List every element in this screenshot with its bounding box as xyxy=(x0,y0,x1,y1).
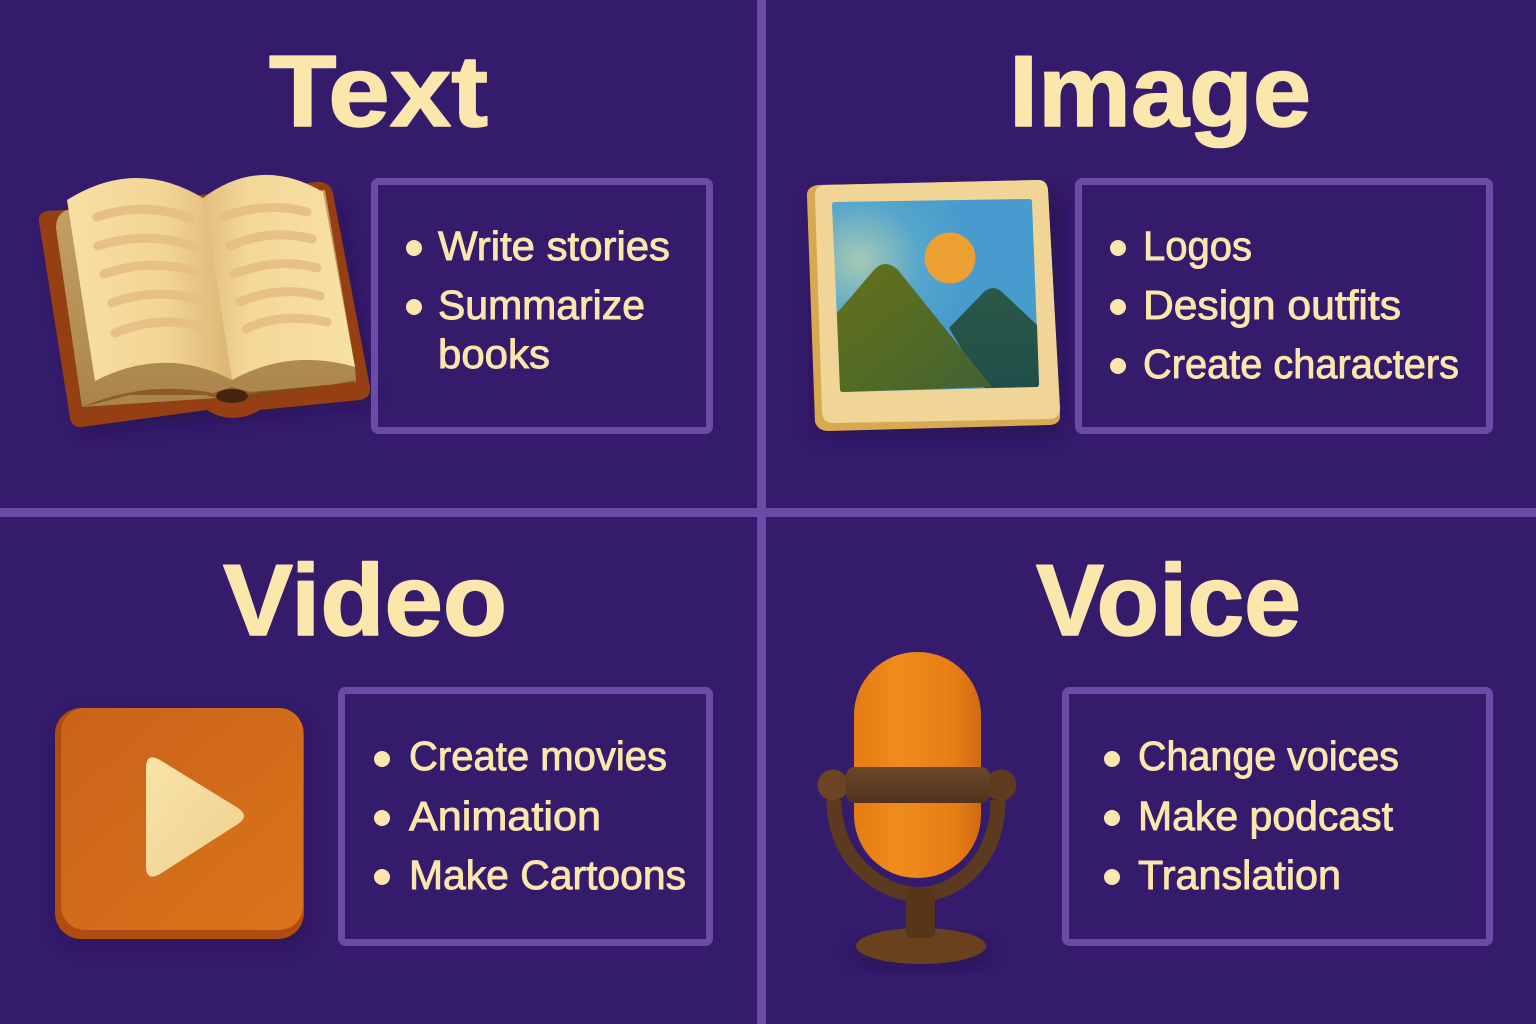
heading: Voice: Voice xyxy=(1036,545,1301,657)
text box: Video uses: Create movies xyxy=(409,733,667,779)
heading: Video: Video xyxy=(223,545,507,657)
text box: Image uses: Logos xyxy=(1143,223,1252,269)
panel: Image xyxy=(807,36,1490,437)
text box: Text uses xyxy=(374,182,710,430)
panel: Voice xyxy=(818,545,1490,968)
text box: Voice uses: Translation xyxy=(1138,852,1341,898)
text box: Voice uses xyxy=(1066,690,1490,942)
text box: Image uses: Design outfits xyxy=(1143,282,1401,328)
text box: Image uses xyxy=(1078,182,1490,430)
heading: Image: Image xyxy=(1009,36,1311,148)
text box: Text uses: books xyxy=(438,331,550,377)
text box: Video uses xyxy=(342,690,710,942)
text box: Video uses: Animation xyxy=(409,793,601,839)
text box: Text uses: Summarize xyxy=(438,282,645,328)
icon: picture frame xyxy=(807,180,1062,437)
text box: Voice uses: Change voices xyxy=(1138,733,1399,779)
text box: Image uses: Create characters xyxy=(1143,341,1459,387)
text box: Text uses: Write stories xyxy=(438,223,670,269)
heading: Text: Text xyxy=(269,36,488,148)
text box: Video uses: Make Cartoons xyxy=(409,852,686,898)
panel: Text xyxy=(39,36,709,432)
icon: open book xyxy=(39,175,372,432)
icon: microphone xyxy=(818,652,1016,968)
panel: Video xyxy=(55,545,710,946)
icon: play button xyxy=(55,708,308,946)
text box: Voice uses: Make podcast xyxy=(1138,793,1394,839)
